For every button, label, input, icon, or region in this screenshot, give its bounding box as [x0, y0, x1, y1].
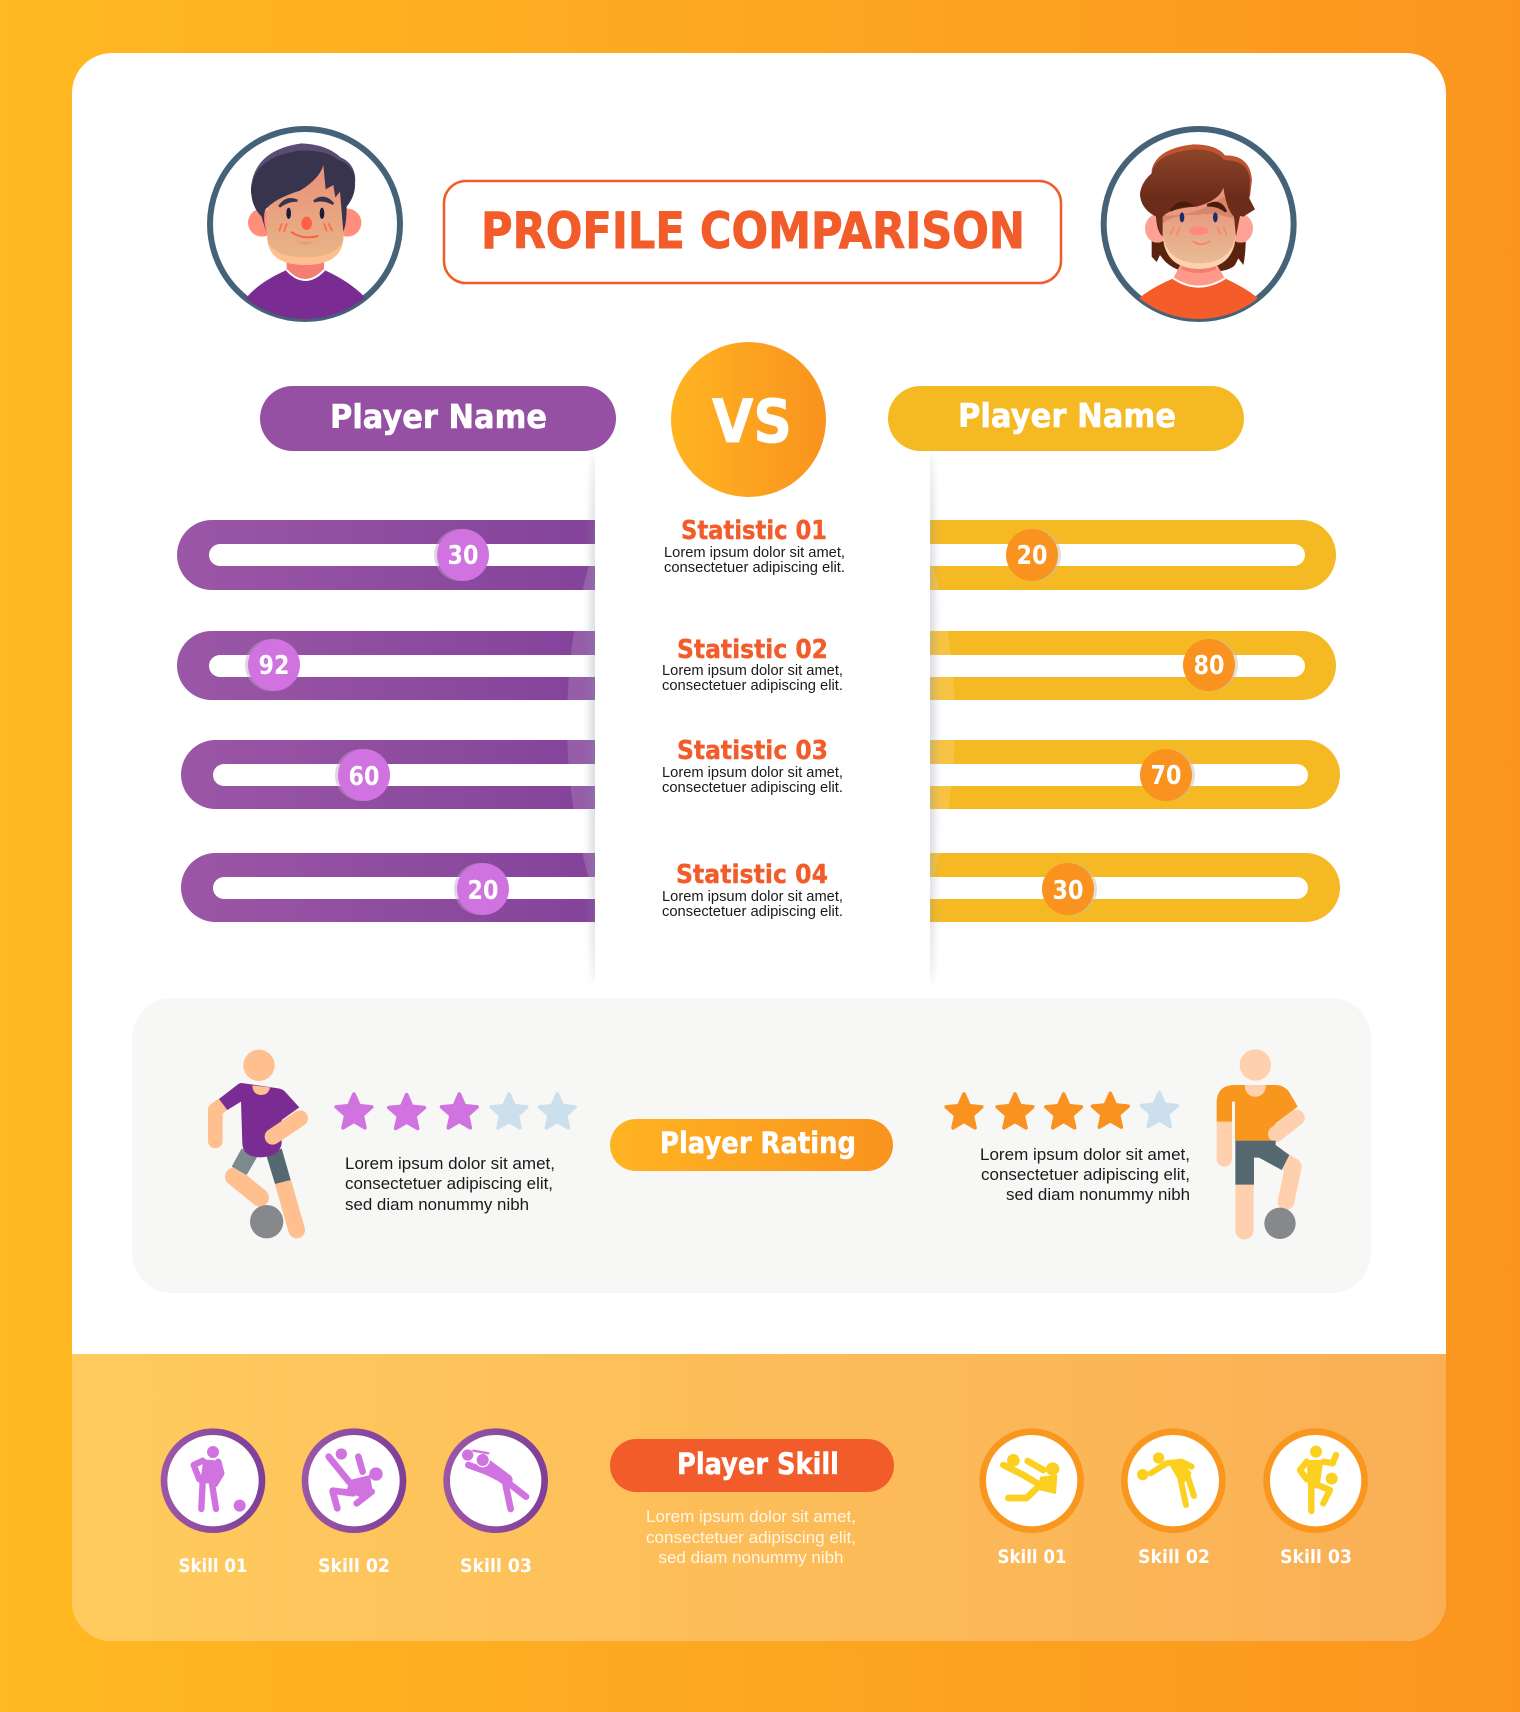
right knobs: 30: [1052, 876, 1084, 906]
left knobs: 60: [348, 762, 380, 792]
statistic 03: consectetuer adipiscing elit.: [662, 780, 843, 796]
icon: skill 01 left: [164, 1432, 262, 1530]
rating text: left player: [345, 1154, 555, 1214]
avatar: left player: [210, 129, 400, 320]
statistic 04: Lorem ipsum dolor sit amet,: [662, 889, 843, 905]
right skill labels: Skill 03: [1280, 1546, 1352, 1568]
player rating pill: [610, 1119, 893, 1171]
left skill icons: [164, 1432, 545, 1530]
statistic 02: consectetuer adipiscing elit.: [662, 678, 843, 694]
avatar: right player: [1104, 129, 1294, 320]
statistic 01: Statistic 01: [681, 516, 827, 546]
statistic 02: [662, 635, 843, 694]
statistic 03: Lorem ipsum dolor sit amet,: [662, 765, 843, 781]
player rating pill: Player Rating: [660, 1126, 856, 1160]
left knobs: 92: [258, 651, 290, 681]
rating text: left player: sed diam nonummy nibh: [345, 1195, 529, 1214]
left skill labels: [178, 1555, 532, 1577]
rating text: right player: consectetuer adipiscing elit,: [981, 1165, 1190, 1184]
player skill pill: Player Skill: [677, 1447, 839, 1481]
right knobs: 20: [1016, 541, 1048, 571]
right skill icons: [983, 1432, 1365, 1530]
right skill labels: Skill 02: [1138, 1546, 1210, 1568]
player name pill: left: [260, 386, 616, 451]
center panel: statistics: [590, 453, 935, 993]
title: PROFILE COMPARISON: [481, 202, 1025, 260]
right knobs: 70: [1150, 761, 1182, 791]
statistic 01: consectetuer adipiscing elit.: [664, 560, 845, 576]
rating text: left player: Lorem ipsum dolor sit amet,: [345, 1154, 555, 1173]
title: [444, 181, 1061, 283]
right knobs: 80: [1194, 651, 1224, 681]
player name pill: right: Player Name: [958, 396, 1176, 435]
skill description text: [646, 1507, 856, 1567]
right skill labels: Skill 01: [998, 1546, 1066, 1568]
left player statistic bars: [177, 520, 595, 922]
icon: skill 02 left: [305, 1432, 403, 1530]
statistic 01: [664, 516, 845, 576]
right knobs: [1006, 529, 1238, 915]
statistic 02: Lorem ipsum dolor sit amet,: [662, 663, 843, 679]
statistic 03: Statistic 03: [677, 736, 828, 766]
left knobs: [245, 529, 509, 915]
left skill labels: Skill 01: [178, 1555, 248, 1577]
figure: left player: [215, 1050, 300, 1238]
left knobs: 30: [448, 541, 478, 571]
rating text: right player: [980, 1145, 1190, 1204]
statistic 02: Statistic 02: [677, 635, 828, 665]
rating text: right player: Lorem ipsum dolor sit amet,: [980, 1145, 1190, 1164]
star rating: left player: [336, 1094, 575, 1128]
skill description text: consectetuer adipiscing elit,: [646, 1528, 856, 1547]
panel: player rating: [132, 998, 1371, 1293]
player name pill: left: Player Name: [330, 397, 547, 436]
icon: skill 03 right: [1267, 1432, 1365, 1530]
VS badge: [671, 342, 826, 497]
VS badge: VS: [712, 387, 792, 457]
icon: skill 01 right: [983, 1432, 1081, 1530]
player name pill: right: [888, 386, 1244, 451]
statistic 04: consectetuer adipiscing elit.: [662, 904, 843, 920]
left knobs: 20: [468, 876, 498, 906]
player skill pill: [610, 1439, 894, 1492]
statistic 01: Lorem ipsum dolor sit amet,: [664, 545, 845, 561]
statistic 03: [662, 736, 843, 796]
star rating: right player: [946, 1093, 1177, 1128]
statistic 04: Statistic 04: [676, 860, 828, 890]
statistic 04: [662, 860, 843, 920]
right player statistic bars: [930, 520, 1340, 922]
right skill labels: [998, 1546, 1352, 1568]
rating text: right player: sed diam nonummy nibh: [1006, 1185, 1190, 1204]
skill description text: Lorem ipsum dolor sit amet,: [646, 1507, 856, 1526]
skill description text: sed diam nonummy nibh: [658, 1548, 844, 1567]
icon: skill 03 left: [447, 1432, 545, 1530]
icon: skill 02 right: [1124, 1432, 1222, 1530]
rating text: left player: consectetuer adipiscing elit,: [345, 1174, 553, 1193]
left skill labels: Skill 03: [460, 1555, 532, 1577]
panel: player skill strip: [72, 1354, 1446, 1641]
left skill labels: Skill 02: [318, 1555, 390, 1577]
figure: right player: [1217, 1049, 1298, 1239]
